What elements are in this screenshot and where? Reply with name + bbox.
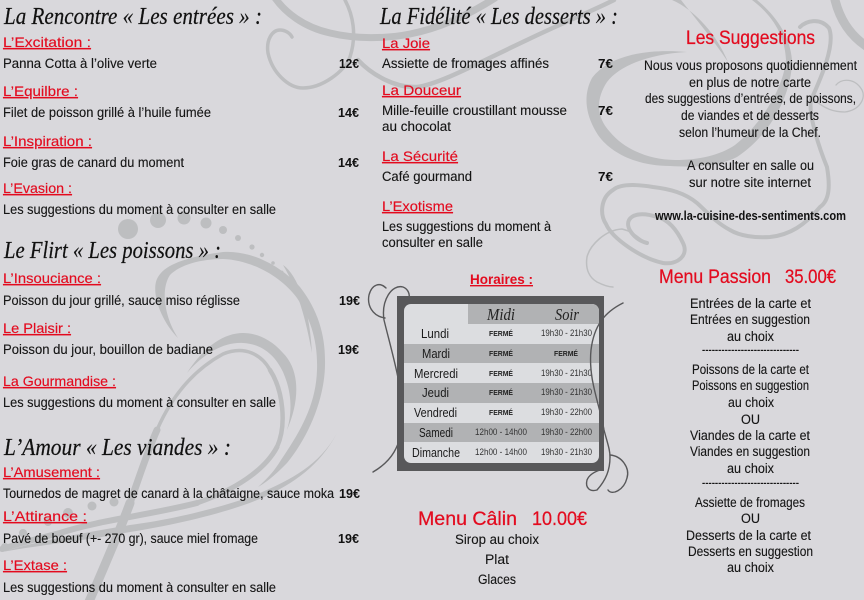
item: insouciance: 19€ xyxy=(339,293,360,308)
item: extase: L’Extase : xyxy=(3,557,67,573)
item: evasion: L’Evasion : xyxy=(3,180,72,196)
midi column: 12h00 - 14h00 xyxy=(475,427,527,437)
column headings: Soir xyxy=(555,305,579,324)
item: equilibre: Filet de poisson grillé à l’huile fumée xyxy=(3,105,211,120)
heading: le flirt: Le Flirt « Les poissons » : xyxy=(3,238,221,264)
item: gourmandise: Les suggestions du moment à consulter en salle xyxy=(3,395,276,410)
suggestions text xyxy=(644,58,857,190)
menu passion courses: Viandes de la carte et xyxy=(690,428,810,443)
item: extase xyxy=(3,557,276,595)
menu passion title: 35.00€ xyxy=(785,267,836,288)
item: attirance xyxy=(3,508,359,546)
menu passion courses: Assiette de fromages xyxy=(695,495,805,510)
item: la douceur xyxy=(382,82,613,134)
item: la sécurité: 7€ xyxy=(598,169,613,184)
item: plaisir xyxy=(3,320,359,357)
menu câlin items: Plat xyxy=(485,552,509,567)
menu câlin title: Menu Câlin xyxy=(418,509,517,530)
item: attirance: 19€ xyxy=(338,531,359,546)
day labels: Vendredi xyxy=(414,406,457,420)
panel: les entrées xyxy=(3,4,359,217)
soir column xyxy=(541,328,592,457)
item: la joie: 7€ xyxy=(598,56,613,71)
item: amusement: L’Amusement : xyxy=(3,464,100,480)
menu passion courses: au choix xyxy=(727,329,774,344)
menu passion courses: ------------------------------ xyxy=(702,342,799,357)
item: evasion: Les suggestions du moment à consulter en salle xyxy=(3,202,276,217)
item: la joie: Assiette de fromages affinés xyxy=(382,56,549,71)
heading: l'amour: L’Amour « Les viandes » : xyxy=(3,435,231,461)
item: attirance: Pavé de boeuf (+- 270 gr), sauce miel fromage xyxy=(3,531,258,546)
item: excitation: L’Excitation : xyxy=(3,34,91,50)
menu passion courses: Viandes en suggestion xyxy=(690,444,810,459)
item: plaisir: 19€ xyxy=(338,342,359,357)
midi column: 12h00 - 14h00 xyxy=(475,447,527,457)
midi column: FERMÉ xyxy=(489,388,513,397)
day labels: Dimanche xyxy=(412,446,460,460)
item: amusement xyxy=(3,464,360,501)
column headings xyxy=(486,305,579,324)
menu câlin items: Glaces xyxy=(478,572,516,587)
panel: les suggestions xyxy=(644,28,857,223)
menu passion courses: ------------------------------ xyxy=(702,475,799,490)
panel: menu passion xyxy=(659,267,836,575)
menu câlin items: Sirop au choix xyxy=(455,532,539,547)
item: plaisir: Le Plaisir : xyxy=(3,320,71,336)
midi column xyxy=(475,329,527,457)
day labels: Jeudi xyxy=(422,386,449,400)
day labels: Mardi xyxy=(422,347,450,361)
item: insouciance: L’Insouciance : xyxy=(3,270,101,286)
suggestions text: en plus de notre carte xyxy=(689,75,811,90)
item: equilibre xyxy=(3,83,359,120)
midi column: FERMÉ xyxy=(489,349,513,358)
item: l'exotisme: L’Exotisme xyxy=(382,198,453,214)
column headings: Midi xyxy=(486,305,515,324)
menu passion courses: Entrées en suggestion xyxy=(690,312,810,327)
midi column: FERMÉ xyxy=(489,329,513,338)
suggestions text: A consulter en salle ou xyxy=(687,158,814,173)
panel: les poissons xyxy=(3,238,360,410)
soir column: 19h30 - 21h30 xyxy=(541,328,592,338)
item: attirance: L’Attirance : xyxy=(3,508,87,524)
decorative dots xyxy=(1,212,308,551)
item: amusement: 19€ xyxy=(339,486,360,501)
panel: les viandes xyxy=(3,435,360,595)
item: inspiration: Foie gras de canard du moment xyxy=(3,155,184,170)
item: plaisir: Poisson du jour, bouillon de badiane xyxy=(3,342,213,357)
panel: menu câlin xyxy=(418,509,587,587)
header cell xyxy=(468,304,599,324)
item: la sécurité: Café gourmand xyxy=(382,169,472,184)
item: evasion xyxy=(3,180,276,217)
item: equilibre: L’Equilbre : xyxy=(3,83,78,99)
item: la douceur: La Douceur xyxy=(382,82,461,98)
menu passion courses: Desserts de la carte et xyxy=(686,528,811,543)
day labels: Lundi xyxy=(421,327,449,341)
item: excitation: 12€ xyxy=(339,56,359,71)
menu passion courses: OU xyxy=(741,511,760,526)
item: l'exotisme: Les suggestions du moment à xyxy=(382,219,551,234)
opening hours table xyxy=(397,296,604,471)
day labels: Mercredi xyxy=(414,367,458,381)
menu passion courses: au choix xyxy=(727,461,774,476)
item: l'exotisme xyxy=(382,198,551,250)
item: inspiration: 14€ xyxy=(338,155,359,170)
menu passion courses: OU xyxy=(741,412,760,427)
menu câlin title xyxy=(418,509,587,530)
day labels xyxy=(412,327,460,460)
soir column: FERMÉ xyxy=(554,349,578,358)
soir column: 19h30 - 22h00 xyxy=(541,407,592,417)
item: la douceur: 7€ xyxy=(598,103,613,118)
suggestions text: sur notre site internet xyxy=(689,175,811,190)
menu passion title: Menu Passion xyxy=(659,267,771,288)
item: excitation xyxy=(3,34,359,71)
menu passion title xyxy=(659,267,836,288)
suggestions text: de viandes et de desserts xyxy=(681,108,819,123)
item: equilibre: 14€ xyxy=(338,105,359,120)
menu passion courses: Entrées de la carte et xyxy=(690,296,811,311)
suggestions text: selon l’humeur de la Chef. xyxy=(679,125,821,140)
item: inspiration: L’Inspiration : xyxy=(3,133,92,149)
item: la sécurité xyxy=(382,148,613,184)
suggestions title: Les Suggestions xyxy=(686,28,815,49)
panel: les desserts xyxy=(379,4,618,250)
table flourishes xyxy=(369,285,628,492)
midi column: FERMÉ xyxy=(489,369,513,378)
item: gourmandise xyxy=(3,373,276,410)
item: extase: Les suggestions du moment à consulter en salle xyxy=(3,580,276,595)
soir column: 19h30 - 21h30 xyxy=(541,368,592,378)
item: gourmandise: La Gourmandise : xyxy=(3,373,116,389)
table frame xyxy=(397,296,604,471)
menu passion courses: Poissons de la carte et xyxy=(692,362,809,377)
menu câlin items xyxy=(455,532,539,587)
menu passion courses: au choix xyxy=(728,395,774,410)
soir column: 19h30 - 21h30 xyxy=(541,387,592,397)
item: l'exotisme: consulter en salle xyxy=(382,235,483,250)
item: inspiration xyxy=(3,133,359,170)
heading: horaires: Horaires : xyxy=(470,271,533,287)
midi column: FERMÉ xyxy=(489,408,513,417)
menu passion courses: Desserts en suggestion xyxy=(688,544,813,559)
item: la sécurité: La Sécurité xyxy=(382,148,458,164)
item: insouciance xyxy=(3,270,360,308)
heading: la fidélité: La Fidélité « Les desserts » : xyxy=(379,4,618,30)
soir column: 19h30 - 22h00 xyxy=(541,427,592,437)
item: insouciance: Poisson du jour grillé, sauce miso réglisse xyxy=(3,293,240,308)
item: excitation: Panna Cotta à l’olive verte xyxy=(3,56,157,71)
menu passion courses: Poissons en suggestion xyxy=(692,378,809,393)
heading: la rencontre: La Rencontre « Les entrées » : xyxy=(3,4,262,30)
menu passion courses xyxy=(686,296,813,575)
menu câlin title: 10.00€ xyxy=(532,509,587,530)
day labels: Samedi xyxy=(419,426,453,440)
striped rows xyxy=(404,344,599,442)
item: amusement: Tournedos de magret de canard à la châtaigne, sauce moka xyxy=(3,486,334,501)
item: la douceur: au chocolat xyxy=(382,119,451,134)
menu passion courses: au choix xyxy=(727,560,774,575)
item: la joie: La Joie xyxy=(382,35,430,51)
item: la douceur: Mille-feuille croustillant mousse xyxy=(382,103,567,118)
item: la joie xyxy=(382,35,613,71)
soir column: 19h30 - 21h30 xyxy=(541,447,592,457)
table body xyxy=(404,304,599,463)
